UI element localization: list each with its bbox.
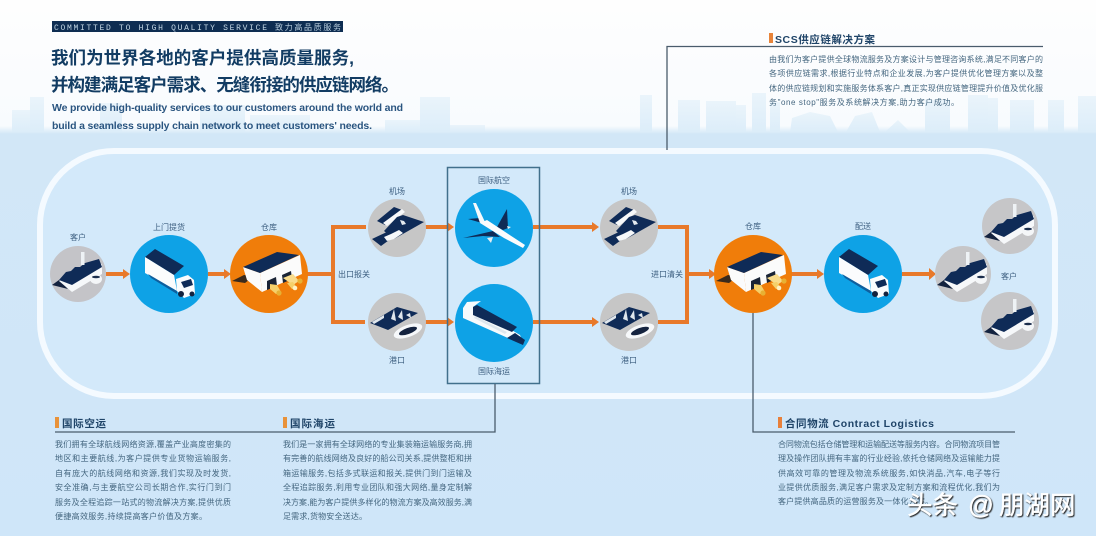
node: customer factory middle	[935, 246, 991, 302]
node: origin port	[368, 293, 426, 351]
connector: SCS	[667, 46, 1043, 150]
section: air freight: 国际空运	[62, 417, 106, 430]
node labels: 机场	[621, 186, 637, 196]
english subtitle	[52, 102, 403, 132]
section: ocean freight: 足需求,货物安全送达。	[283, 511, 367, 521]
section: air freight: 便捷高效服务,持续提高客户价值及方案。	[55, 511, 207, 521]
node: customer factory top	[982, 198, 1038, 254]
section: contract logistics: 供高效可靠的管理及物流系统服务,如快消品,汽车,电子等行	[778, 468, 1000, 478]
node: destination airport	[600, 199, 658, 257]
tag line: 致力高品质服务	[275, 22, 341, 32]
node: ocean freight ship	[455, 284, 533, 362]
section: SCS solution: 务"one stop"服务及系统解决方案,助力客户成功。	[769, 97, 959, 107]
section: air freight: 地区和主要航线,为客户提供专业货物运输服务,	[55, 453, 231, 463]
node labels: 港口	[621, 355, 637, 365]
node labels: 上门提货	[153, 222, 185, 232]
section: ocean freight: 我们是一家拥有全球网络的专业集装箱运输服务商,拥	[283, 439, 472, 449]
headline: 并构建满足客户需求、无缝衔接的供应链网络。	[51, 75, 399, 95]
international freight box	[448, 168, 540, 384]
section: air freight: 服务及全程追踪一站式的物流解决方案,提供优质	[55, 497, 231, 507]
watermark: 头条	[907, 492, 958, 520]
section: SCS solution: SCS供应链解决方案	[775, 33, 876, 46]
section: ocean freight: 有完善的航线网络及良好的船公司关系,提供整柜和拼	[283, 453, 472, 463]
node: destination warehouse	[714, 235, 792, 313]
section: SCS solution: 各项供应链需求,根据行业特点和企业发展,为客户提供优化管理方案以及整	[769, 68, 1043, 78]
headline	[51, 48, 399, 95]
tag line	[52, 21, 343, 33]
connector: international freight	[55, 384, 495, 432]
section: contract logistics: 客户提供高品质的运营服务及一体化方案。	[778, 496, 933, 506]
node labels	[70, 175, 1017, 376]
node labels: 进口清关	[651, 269, 683, 279]
node labels: 客户	[70, 232, 86, 242]
node labels: 机场	[389, 186, 405, 196]
headline: 我们为世界各地的客户提供高质量服务,	[51, 48, 354, 68]
node labels: 国际海运	[478, 366, 510, 376]
section: ocean freight: 决方案,能为客户提供多样化的物流方案及高效服务,满	[283, 497, 472, 507]
section: air freight	[55, 417, 231, 521]
section: SCS solution	[769, 33, 1043, 107]
node: origin warehouse	[230, 235, 308, 313]
arrow heads	[123, 222, 936, 327]
section: ocean freight: 箱运输服务,包括多式联运和报关,提供门到门运输及	[283, 468, 472, 478]
node: air freight plane	[455, 189, 533, 267]
node: origin airport	[368, 199, 426, 257]
english subtitle: build a seamless supply chain network to meet customers' needs.	[52, 120, 372, 132]
node: source factory	[50, 246, 106, 302]
section: contract logistics: 合同物流 Contract Logistics	[785, 417, 934, 430]
node labels: 港口	[389, 355, 405, 365]
node labels: 客户	[1001, 271, 1017, 281]
section: contract logistics	[778, 417, 1000, 506]
section: contract logistics: 理及操作团队拥有丰富的行业经验,依托仓储网络及运输能力提	[778, 453, 1000, 463]
node: pickup truck	[130, 235, 208, 313]
route panel	[40, 151, 1055, 396]
node labels: 仓库	[745, 221, 761, 231]
watermark: 朋湖网	[999, 492, 1076, 520]
watermark: @	[968, 492, 994, 520]
connector: contract logistics	[753, 313, 1015, 432]
english subtitle: We provide high-quality services to our customers around the world and	[52, 102, 403, 114]
section: air freight: 自有庞大的航线网络和资源,我们实现及时发货,	[55, 468, 231, 478]
section: air freight: 安全准确,与主要航空公司长期合作,实行门到门	[55, 482, 231, 492]
node labels: 配送	[855, 221, 871, 231]
section: ocean freight: 国际海运	[290, 417, 336, 430]
section: ocean freight: 全程追踪服务,利用专业团队和强大网络,量身定制解	[283, 482, 472, 492]
node: customer factory bottom	[981, 292, 1039, 350]
orange connectors	[106, 227, 931, 322]
section: SCS solution: 由我们为客户提供全球物流服务及方案设计与管理咨询系统,满足不同客户的	[769, 54, 1043, 64]
section: ocean freight	[283, 417, 472, 521]
node labels: 仓库	[261, 222, 277, 232]
section: contract logistics: 合同物流包括仓储管理和运输配送等服务内容。合同物流项目管	[778, 439, 1000, 449]
node labels: 出口报关	[338, 269, 370, 279]
tag line: COMMITTED TO HIGH QUALITY SERVICE	[54, 24, 267, 33]
section: contract logistics: 业提供优质服务,满足客户需求及定制方案和流程优化,我们为	[778, 482, 1000, 492]
node labels: 国际航空	[478, 175, 510, 185]
node: destination port	[600, 293, 658, 351]
section: air freight: 我们拥有全球航线网络资源,覆盖产业高度密集的	[55, 439, 231, 449]
skyline	[12, 93, 1096, 132]
node: delivery truck	[824, 235, 902, 313]
section: SCS solution: 体的供应链规划和实施服务体系客户,真正实现供应链管理提升价值及优化服	[769, 83, 1043, 93]
